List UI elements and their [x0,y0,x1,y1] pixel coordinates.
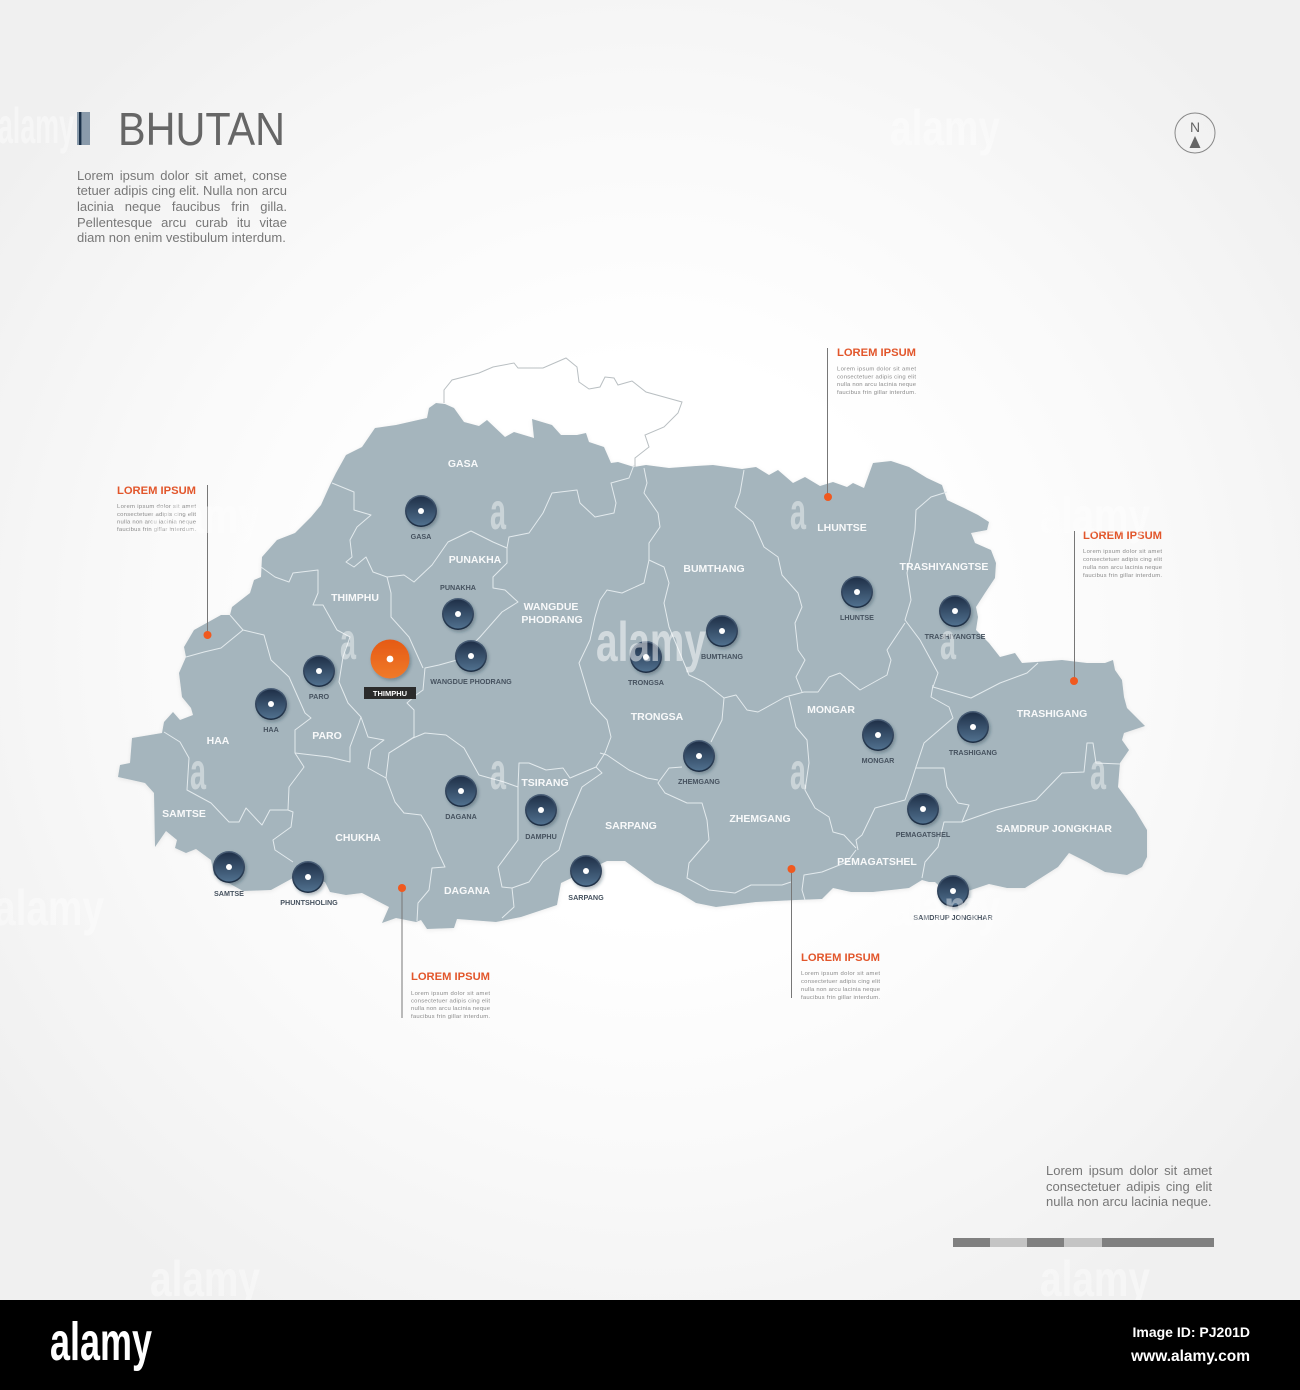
callout: top: LOREM IPSUM [837,347,916,359]
pin: Samtse [213,851,245,898]
callout: bottom left: Lorem ipsum dolor sit amet [411,991,490,997]
callout: right: LOREM IPSUM [1083,530,1162,542]
district names: TRASHIYANGTSE [900,561,988,573]
watermark: background: alamy [890,100,1000,156]
pin: Damphu: DAMPHU [525,832,557,841]
district names: ZHEMGANG [729,813,791,825]
pin: Samdrup Jongkhar [913,875,993,922]
callout: right [1070,530,1163,685]
watermark: background: alamy [150,1251,260,1307]
pin: Paro [303,655,335,701]
watermark: background [0,98,1150,1307]
pin: Wangdue Phodrang [430,640,512,686]
footer logo: alamy [50,1312,152,1372]
pin: Sarpang [568,855,604,902]
district names: PEMAGATSHEL [837,856,917,868]
district names: SAMTSE [162,808,206,820]
watermark: background: alamy [1040,1251,1150,1307]
callout: right: nulla non arcu lacinia neque [1083,565,1163,571]
watermark: background: alamy [150,488,260,544]
pin: Pemagatshel [896,793,951,839]
callout: right: Lorem ipsum dolor sit amet [1083,549,1162,555]
pin: Trashiyangtse [925,595,986,641]
callout: left: nulla non arcu lacinia neque [117,520,197,526]
disputed northern border line [444,358,682,467]
district names: TRONGSA [631,711,684,723]
callout: bottom left: LOREM IPSUM [411,971,490,983]
pin: Dagana: DAGANA [445,812,477,821]
callout: top: faucibus frin gillar interdum. [837,390,916,396]
pin: Trongsa: TRONGSA [628,678,664,687]
callout: top: consectetuer adipis cing elit [837,374,916,380]
north compass [1175,113,1215,153]
callout: left [117,485,212,639]
footer url: www.alamy.com [1130,1348,1250,1365]
callout: bottom left: consectetuer adipis cing elit [411,998,490,1004]
watermark: over map: a [940,613,957,671]
callout: bottom right: consectetuer adipis cing elit [801,979,880,985]
watermark: centre word: alamy [596,610,706,673]
district borders [164,465,1120,921]
pin: Zhemgang: ZHEMGANG [678,777,720,786]
footer bar [0,1300,1300,1390]
watermark: over map: a [790,483,807,541]
callout: bottom right: Lorem ipsum dolor sit amet [801,971,880,977]
bottom text [1046,1163,1212,1209]
disputed northern outline [444,358,682,467]
callout: bottom left: nulla non arcu lacinia neque [411,1006,491,1012]
district names: PHODRANG [521,614,583,626]
pin: Zhemgang [678,740,720,786]
pin: Sarpang: SARPANG [568,893,604,902]
district names: CHUKHA [335,832,381,844]
pin: Gasa [405,495,437,541]
bottom text: Lorem ipsum dolor sit amet [1046,1163,1212,1178]
district names: GASA [448,458,479,470]
pin: Trashigang [949,711,998,757]
intro text [77,168,287,245]
district names: PUNAKHA [449,554,502,566]
pin: Punakha [440,583,476,630]
pin: Gasa: GASA [411,532,431,541]
bottom text: consectetuer adipis cing elit [1046,1179,1212,1194]
watermark: background: alamy [890,880,1000,936]
callout: bottom right: LOREM IPSUM [801,952,880,964]
intro text: diam non enim vestibulum interdum. [77,230,286,245]
map of Bhutan [118,403,1147,929]
watermark: over map: a [790,743,807,801]
footer image id: Image ID: PJ201D [1132,1324,1250,1340]
callout: right: faucibus frin gillar interdum. [1083,573,1162,579]
pin: Lhuntse: LHUNTSE [840,613,874,622]
pin: Trashiyangtse: TRASHIYANGTSE [925,632,986,641]
pin: Dagana [445,775,477,821]
title: BHUTAN [118,103,285,155]
pin: Pemagatshel: PEMAGATSHEL [896,830,951,839]
callout: top [824,347,917,501]
bottom text: nulla non arcu lacinia neque. [1046,1194,1212,1209]
capital pin: Thimphu: THIMPHU [373,689,407,698]
district names [162,458,1112,897]
callout: left: LOREM IPSUM [117,485,196,497]
intro text: Lorem ipsum dolor sit amet, conse [77,168,287,182]
watermark: background: alamy [0,98,74,154]
watermark: over map: a [490,483,507,541]
district names: SAMDRUP JONGKHAR [996,823,1112,835]
callout: left: consectetuer adipis cing elit [117,512,196,518]
intro text: tetuer adipis cing elit. Nulla non arcu [77,183,287,198]
district names: LHUNTSE [817,522,867,534]
callout: bottom right: nulla non arcu lacinia neque [801,987,881,993]
pin: Trongsa [628,641,664,687]
callout: bottom left: faucibus frin gillar interdum. [411,1014,490,1020]
watermark: over map: a [490,743,507,801]
callout: right: consectetuer adipis cing elit [1083,557,1162,563]
callout: left: Lorem ipsum dolor sit amet [117,504,196,510]
pin: Bumthang [701,615,743,661]
callout: bottom right: faucibus frin gillar interdum. [801,995,880,1001]
pin: Bumthang: BUMTHANG [701,652,743,661]
district names: DAGANA [444,885,490,897]
callout: top: Lorem ipsum dolor sit amet [837,366,916,372]
callout: bottom left [398,884,491,1020]
watermark: over map: a [1090,743,1107,801]
watermark: over map: a [190,743,207,801]
watermark: over map: a [340,613,357,671]
scale bar [953,1238,1214,1247]
watermark: over map [190,483,1107,801]
pin: Mongar [862,719,895,765]
district names: HAA [207,735,230,747]
country shape [118,403,1147,929]
pin: Damphu [525,794,557,841]
callout: top: nulla non arcu lacinia neque [837,382,917,388]
capital pin: Thimphu [364,640,416,699]
district names: TSIRANG [521,777,569,789]
district names: WANGDUE [524,601,578,613]
intro text: lacinia neque faucibus frin gilla. [77,199,287,214]
district names: PARO [312,730,342,742]
pin: Punakha: PUNAKHA [440,583,476,592]
pin: Trashigang: TRASHIGANG [949,748,998,757]
pin: Wangdue Phodrang: WANGDUE PHODRANG [430,677,512,686]
district names: TRASHIGANG [1017,708,1087,720]
title icon [77,112,90,145]
pin: Lhuntse [840,576,874,622]
district names: BUMTHANG [683,563,745,575]
district names: THIMPHU [331,592,379,604]
pin: Paro: PARO [309,692,330,701]
callout: left: faucibus frin gillar interdum. [117,527,196,533]
intro text: Pellentesque arcu curab itu vitae [77,215,287,230]
callout: bottom right [788,865,881,1001]
district names: SARPANG [605,820,657,832]
watermark: background: alamy [1040,488,1150,544]
pin: Samtse: SAMTSE [214,889,244,898]
pin: Phuntsholing: PHUNTSHOLING [280,898,338,907]
pin: Phuntsholing [280,861,338,907]
pin: Haa [255,688,287,734]
pin: Haa: HAA [263,725,279,734]
pin: Mongar: MONGAR [862,756,895,765]
district names: MONGAR [807,704,855,716]
north compass: N [1190,119,1200,135]
pin: Samdrup Jongkhar: SAMDRUP JONGKHAR [913,913,993,922]
